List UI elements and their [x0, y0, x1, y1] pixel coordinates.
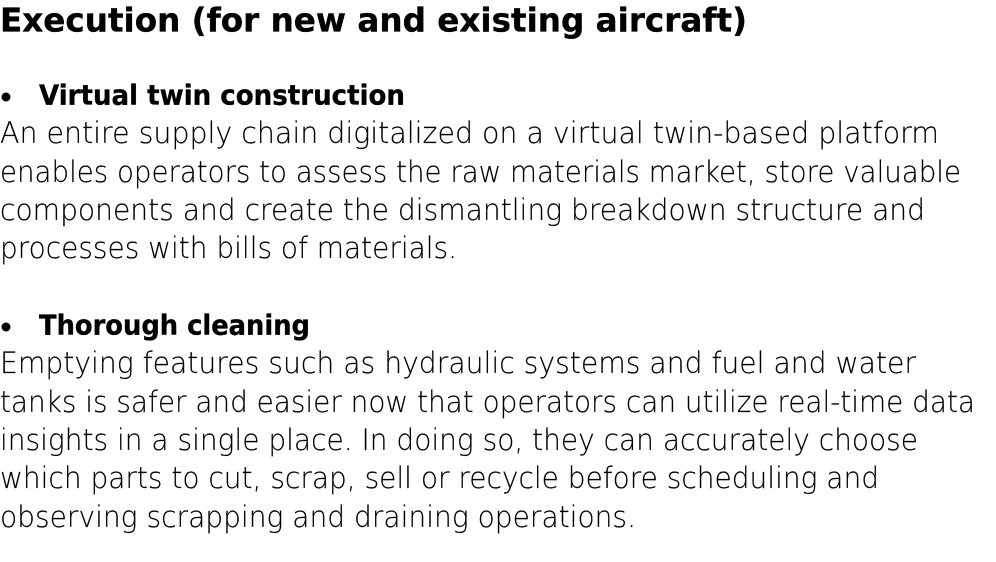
body text: components and create the dismantling breakdown structure and	[0, 193, 925, 227]
bullet	[2, 92, 10, 102]
subheading: Thorough cleaning	[39, 308, 310, 342]
bullet	[2, 322, 10, 332]
section: thorough cleaning	[0, 308, 975, 534]
body text: Emptying features such as hydraulic systems and fuel and water	[0, 346, 916, 380]
body text: observing scrapping and draining operations.	[0, 500, 636, 534]
body text: An entire supply chain digitalized on a virtual twin-based platform	[0, 116, 939, 150]
body text: tanks is safer and easier now that operators can utilize real-time data	[0, 385, 975, 419]
heading: Execution (for new and existing aircraft)	[0, 0, 747, 40]
body text: which parts to cut, scrap, sell or recycle before scheduling and	[0, 461, 879, 495]
body text	[0, 346, 975, 534]
body text: enables operators to assess the raw materials market, store valuable	[0, 155, 961, 189]
section: virtual twin construction	[0, 78, 961, 265]
body text	[0, 116, 961, 265]
subheading: Virtual twin construction	[39, 78, 405, 112]
body text: processes with bills of materials.	[0, 231, 457, 265]
body text: insights in a single place. In doing so, they can accurately choose	[0, 423, 918, 457]
